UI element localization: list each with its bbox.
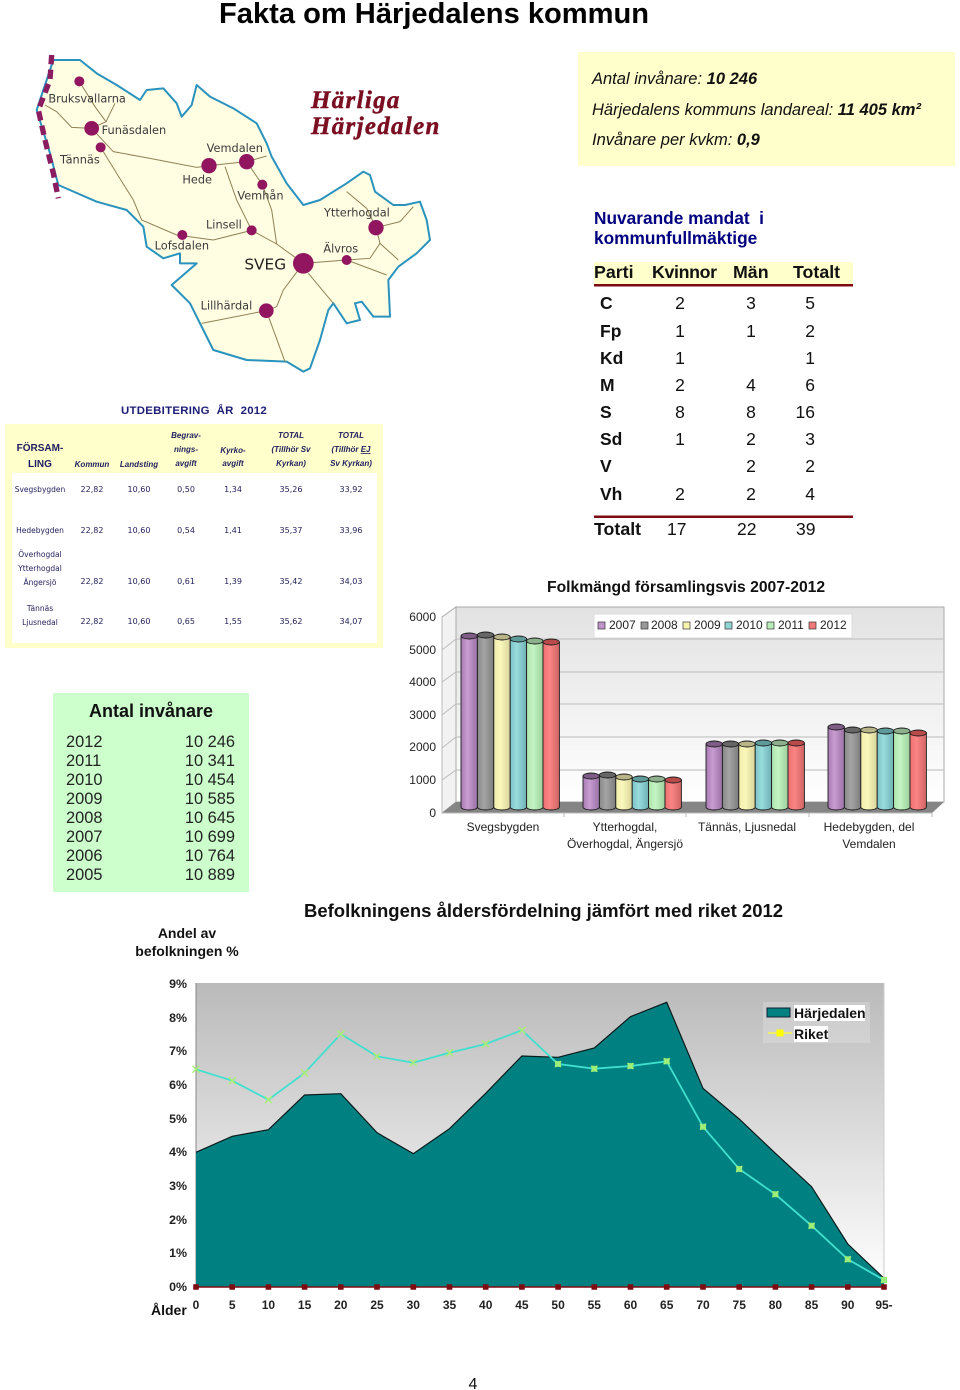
roads (45, 81, 413, 362)
x axis labels: 50 (551, 1298, 565, 1312)
panel: tax table: 1,41 (224, 526, 242, 535)
table: mandates: 2 (746, 456, 756, 476)
area chart legend: Härjedalen (794, 1005, 866, 1021)
table: mandates: 2 (805, 456, 815, 476)
panel: tax table: Kyrko- (220, 446, 246, 455)
panel: tax table: nings- (174, 445, 198, 454)
x axis labels: 95- (875, 1298, 893, 1312)
x axis labels: 90 (841, 1298, 855, 1312)
panel: population by year: 2005 (66, 866, 102, 884)
line: Riket (196, 1030, 884, 1280)
x axis labels: 65 (660, 1298, 674, 1312)
panel: population by year: 10 585 (185, 790, 235, 808)
slogan (310, 87, 441, 140)
panel: tax table: 35,37 (280, 526, 302, 535)
y axis labels: 3000 (409, 708, 436, 722)
panel: population by year: 10 889 (185, 866, 235, 884)
bar chart legend: 2010 (736, 618, 763, 632)
panel: population by year: 2012 (66, 733, 102, 751)
table: mandates: 16 (796, 402, 815, 422)
town labels: Funäsdalen (102, 123, 166, 137)
table: mandates: 3 (746, 293, 756, 313)
panel: key facts: Härjedalens kommuns landareal: 11 405 km² (592, 101, 921, 119)
panel: tax table: Landsting (120, 460, 158, 469)
x axis labels: 75 (733, 1298, 746, 1312)
town labels: SVEG (244, 255, 286, 273)
panel: population by year: 2006 (66, 847, 102, 865)
x axis labels: 85 (805, 1298, 819, 1312)
panel: tax table: Begrav- (171, 431, 201, 440)
panel: tax table (5, 424, 383, 648)
panel: tax table: Ljusnedal (22, 618, 58, 627)
panel: population by year: 10 699 (185, 828, 235, 846)
markers: Riket crosses (192, 1027, 887, 1283)
panel: population by year: 2008 (66, 809, 102, 827)
table: mandates: 17 (667, 519, 686, 539)
bars: Ytterhogdal (583, 772, 681, 810)
panel: tax table: Överhogdal (18, 550, 62, 559)
heading: age distribution: Befolkningens åldersfördelning jämfört med riket 2012 (304, 900, 783, 921)
map of Härjedalen (37, 55, 430, 372)
town labels: Lillhärdal (201, 298, 252, 312)
panel: tax table: avgift (222, 459, 244, 468)
table: mandates: Sd (600, 429, 622, 449)
town labels: Bruksvallarna (48, 92, 126, 106)
panel: tax table: Ytterhogdal (17, 564, 62, 573)
table: mandates: C (600, 293, 613, 313)
baseline series (196, 1286, 884, 1288)
x axis labels: 35 (443, 1298, 456, 1312)
heading: mandates: Nuvarande mandat i (594, 208, 764, 228)
x axis labels: 70 (696, 1298, 710, 1312)
panel: tax table: 1,39 (224, 577, 242, 586)
table: mandates: 1 (675, 321, 685, 341)
panel: tax table: 35,42 (280, 577, 302, 586)
table: mandates: V (600, 456, 612, 476)
panel: tax table: Tännäs (26, 604, 53, 613)
panel: tax table: 34,07 (340, 617, 362, 626)
x axis labels (193, 1298, 893, 1312)
table: mandates: 2 (746, 429, 756, 449)
bar chart legend: 2009 (694, 618, 721, 632)
x axis labels: 20 (334, 1298, 348, 1312)
x axis labels: 60 (624, 1298, 637, 1312)
table: mandates: 2 (675, 375, 685, 395)
x axis labels: 55 (588, 1298, 601, 1312)
panel: population by year: 2009 (66, 790, 102, 808)
category labels: Ytterhogdal, (593, 820, 657, 834)
heading: mandates (594, 208, 764, 248)
table: mandates: Totalt (594, 519, 641, 539)
category labels: Tännäs, Ljusnedal (698, 820, 796, 834)
panel: tax table: TOTAL (338, 431, 364, 440)
y axis labels: 5% (169, 1112, 187, 1126)
town labels: Vemdalen (207, 141, 263, 155)
y axis labels: 8% (169, 1011, 187, 1025)
slogan: Härliga (310, 87, 401, 114)
x axis labels: 80 (769, 1298, 782, 1312)
x axis labels: 10 (262, 1298, 275, 1312)
table: mandates: M (600, 375, 615, 395)
town labels: Linsell (206, 217, 242, 231)
y axis labels: 2000 (409, 740, 436, 754)
panel: tax table: 10,60 (128, 485, 150, 494)
table: mandates: Totalt (793, 262, 840, 282)
panel: population by year: Antal invånare (89, 701, 213, 721)
bars: Hedebygden (828, 724, 926, 810)
panel: tax table: 1,55 (224, 617, 242, 626)
y axis title: share of population: Andel av (158, 925, 216, 941)
western border dashed (38, 55, 58, 198)
panel: tax table: 22,82 (81, 577, 103, 586)
panel: tax table: 22,82 (81, 526, 103, 535)
panel: key facts (578, 52, 955, 166)
panel: tax table: Kommun (75, 460, 109, 469)
area: Härjedalen (196, 1002, 884, 1287)
table: mandates: 8 (675, 402, 685, 422)
table: mandates: 1 (675, 348, 685, 368)
bars: Tännäs (706, 740, 804, 810)
area chart: age distribution (151, 977, 893, 1318)
panel: tax table: 10,60 (128, 526, 150, 535)
x axis labels: 15 (298, 1298, 312, 1312)
town labels: Tännäs (59, 152, 100, 166)
category labels: Överhogdal, Ängersjö (567, 837, 683, 851)
x axis title: Ålder (151, 1302, 187, 1318)
x axis labels: 5 (229, 1298, 236, 1312)
panel: tax table: (Tillhör Sv (272, 445, 311, 454)
panel: tax table: 10,60 (128, 617, 150, 626)
category labels (467, 820, 914, 851)
panel: population by year: 2011 (66, 752, 101, 770)
bars: Svegsbygden (461, 632, 559, 810)
y axis labels: 1000 (409, 773, 436, 787)
panel: population by year: 2010 (66, 771, 102, 789)
panel: key facts: Antal invånare: 10 246 (591, 70, 758, 88)
panel: tax table: avgift (175, 459, 197, 468)
panel: population by year: 10 341 (185, 752, 235, 770)
panel: tax table: Ängersjö (24, 578, 57, 587)
panel: population by year: 10 645 (185, 809, 235, 827)
y axis labels: 9% (169, 977, 187, 991)
table: mandates: 39 (796, 519, 815, 539)
panel: tax table: 0,65 (177, 617, 195, 626)
panel: population by year: 10 246 (185, 733, 235, 751)
category labels: Vemdalen (842, 837, 896, 851)
y axis labels: 6% (169, 1078, 187, 1092)
town labels: Hede (182, 172, 212, 186)
y axis labels (169, 977, 187, 1294)
bar chart: population per parish (409, 607, 944, 851)
table: mandates: 2 (675, 293, 685, 313)
y axis labels: 0% (169, 1280, 187, 1294)
panel: tax table: 33,92 (340, 485, 362, 494)
panel: tax table: 22,82 (81, 617, 103, 626)
panel: tax table: 0,50 (177, 485, 195, 494)
y axis labels: 6000 (409, 610, 436, 624)
panel: population by year (53, 693, 249, 892)
table: mandates (594, 262, 853, 539)
category labels: Hedebygden, del (824, 820, 914, 834)
table: mandates: Vh (600, 484, 622, 504)
town labels: Lofsdalen (155, 238, 209, 252)
panel: tax table: FÖRSAM- (17, 441, 63, 454)
panel: key facts: Invånare per kvkm: 0,9 (592, 131, 761, 149)
panel: tax table: Sv Kyrkan) (330, 459, 372, 468)
panel: tax table: 35,62 (280, 617, 302, 626)
panel: tax table: (Tillhör EJ (332, 445, 371, 454)
panel: tax table: Svegsbygden (15, 485, 66, 494)
markers: Riket squares (555, 1058, 887, 1283)
slogan: Härjedalen (310, 113, 441, 140)
panel: population by year: 10 454 (185, 771, 235, 789)
bar chart legend: 2011 (778, 618, 804, 632)
y axis labels: 7% (169, 1044, 187, 1058)
table: mandates: Parti (594, 262, 634, 282)
y axis labels: 0 (429, 806, 436, 820)
table: mandates: S (600, 402, 612, 422)
y axis labels: 1% (169, 1246, 187, 1260)
panel: tax table: 1,34 (224, 485, 242, 494)
table: mandates: 4 (746, 375, 756, 395)
area chart legend: Riket (794, 1026, 829, 1042)
panel: tax table: Kyrkan) (276, 459, 306, 468)
table: mandates: 6 (805, 375, 815, 395)
table: mandates: Kvinnor (652, 262, 717, 282)
table: mandates: 3 (805, 429, 815, 449)
y axis labels: 4% (169, 1145, 187, 1159)
panel: tax table: 34,03 (340, 577, 362, 586)
table: mandates: 8 (746, 402, 756, 422)
panel: tax table: Hedebygden (16, 526, 64, 535)
plot background (196, 983, 884, 1287)
panel: tax table: 0,61 (177, 577, 195, 586)
x axis labels: 0 (193, 1298, 200, 1312)
town labels: Ytterhogdal (323, 206, 390, 220)
table: mandates: 4 (805, 484, 815, 504)
x axis labels: 45 (515, 1298, 529, 1312)
table: mandates: Kd (600, 348, 623, 368)
category labels: Svegsbygden (467, 820, 539, 834)
table: mandates: Fp (600, 321, 621, 341)
panel: tax table: 35,26 (280, 485, 302, 494)
table: mandates: 2 (805, 321, 815, 341)
x axis labels: 30 (407, 1298, 420, 1312)
bar chart legend: 2008 (651, 618, 678, 632)
area chart legend (763, 1002, 870, 1043)
y axis labels: 4000 (409, 675, 436, 689)
x axis labels: 25 (370, 1298, 384, 1312)
y axis title: share of population: befolkningen % (135, 943, 239, 959)
panel: tax table: 10,60 (128, 577, 150, 586)
town labels: Älvros (323, 242, 358, 256)
bar chart legend: 2007 (609, 618, 636, 632)
map land area (37, 60, 430, 372)
panel: tax table: LING (28, 459, 52, 470)
heading: mandates: kommunfullmäktige (594, 228, 758, 248)
bar chart legend: 2012 (820, 618, 847, 632)
table: mandates: 2 (675, 484, 685, 504)
y axis labels: 2% (169, 1213, 187, 1227)
table: mandates: Män (733, 262, 769, 282)
chart walls and floor (442, 607, 944, 817)
town markers (74, 76, 384, 318)
y axis title: share of population (135, 925, 239, 959)
table: mandates: 2 (746, 484, 756, 504)
table: mandates: 5 (805, 293, 815, 313)
x axis labels: 40 (479, 1298, 493, 1312)
heading: bar chart: Folkmängd församlingsvis 2007-2012 (547, 579, 825, 596)
town labels (48, 92, 390, 312)
panel: tax table: 33,96 (340, 526, 362, 535)
table: mandates: 1 (746, 321, 756, 341)
town labels: Vemhån (237, 188, 284, 202)
y axis labels (409, 610, 436, 820)
panel: population by year: 10 764 (185, 847, 235, 865)
y axis labels: 5000 (409, 643, 436, 657)
heading: tax table: UTDEBITERING ÅR 2012 (121, 404, 267, 417)
panel: population by year: 2007 (66, 828, 102, 846)
table: mandates: 1 (675, 429, 685, 449)
panel: tax table: 0,54 (177, 526, 195, 535)
y axis labels: 3% (169, 1179, 187, 1193)
table: mandates: 1 (805, 348, 815, 368)
bar chart legend (594, 614, 852, 638)
panel: tax table: TOTAL (278, 431, 304, 440)
table: mandates: 22 (737, 519, 756, 539)
panel: tax table: 22,82 (81, 485, 103, 494)
